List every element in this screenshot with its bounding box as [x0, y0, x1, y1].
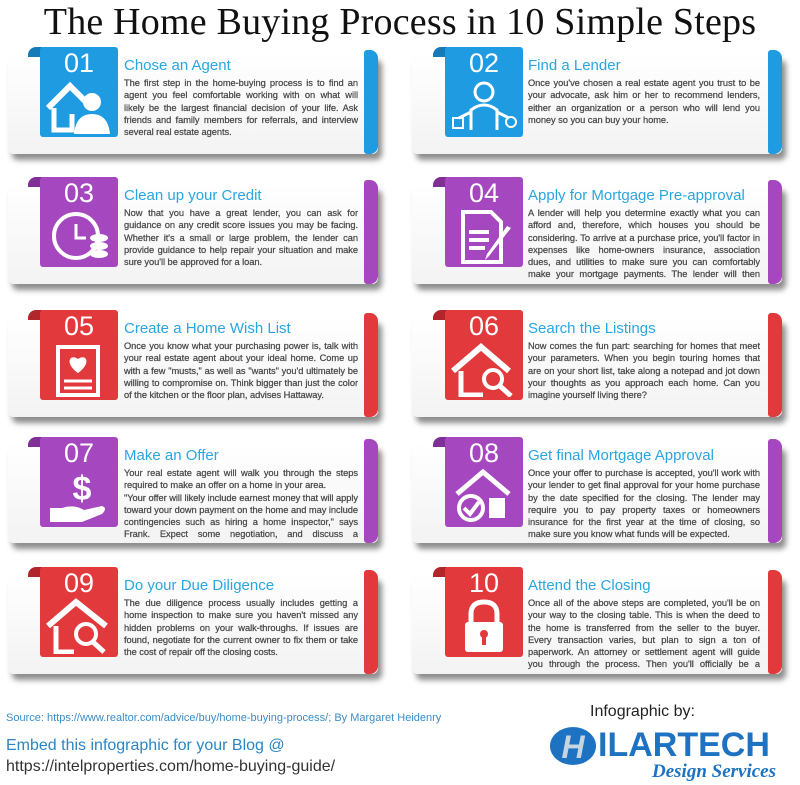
text: step 05: Create a Home Wish List [124, 320, 291, 337]
icon: approval house: 08 [469, 438, 499, 468]
text: step 07: Make an Offer [124, 447, 219, 464]
text: step 06: Search the Listings [528, 320, 656, 337]
title: The Home Buying Process in 10 Simple Steps [44, 1, 756, 43]
panel: step 05 [8, 310, 386, 427]
panel: step 06 [412, 310, 790, 427]
icon: house inspection [40, 567, 118, 657]
icon: credit clock: 03 [64, 178, 94, 208]
embed text [6, 737, 335, 775]
logo: hilartech: ILARTECH [598, 726, 770, 764]
panel: step 10 [412, 567, 790, 684]
embed text: https://intelproperties.com/home-buying-guide/ [6, 758, 335, 775]
icon: house search: 06 [469, 311, 499, 341]
panel: step 09 [8, 567, 386, 684]
text: step 05: Once you know what your purchasing power is, talk with your real estate agent about your ideal home. Come up with a few "musts," as well as "wants" you'd ultimately be willing to compromise on. Think bigger than just the color of the kitchen or the floor plan, advises Hattaway. [124, 341, 358, 400]
icon: hand dollar: $ [73, 470, 92, 508]
logo: hilartech: Design Services [652, 761, 776, 782]
logo: hilartech [550, 703, 776, 782]
icon: lender person [445, 47, 523, 137]
text: step 03: Now that you have a great lender, you can ask for guidance on any credit score issues you may be facing. Whether it's a small or large problem, the lender can provide guidance to help repair your situation and make sure you'll be approved for a loan. [124, 208, 358, 267]
icon: house inspection: 09 [64, 568, 94, 598]
text: step 03: Clean up your Credit [124, 187, 262, 204]
icon: hand dollar [40, 437, 118, 527]
logo: hilartech: Infographic by: [590, 703, 695, 720]
text: step 02: Find a Lender [528, 57, 621, 74]
text: step 07: Your real estate agent will walk you through the steps required to make an offer on a home in your area. [124, 468, 358, 490]
panel: step 02 [412, 47, 790, 164]
icon: hand dollar: 07 [64, 438, 94, 468]
text: step 06: Now comes the fun part: searching for homes that meet your parameters. When you begin touring homes that are on your short list, take along a notepad and jot down your thoughts as you approach each home. Can you imagine yourself living there? [528, 341, 760, 400]
text: step 02 [528, 57, 760, 126]
panel: step 08 [412, 437, 790, 553]
icon: approval house [445, 437, 523, 527]
icon: padlock [445, 567, 523, 657]
panel: step 01 [8, 47, 386, 164]
icon: padlock: 10 [469, 568, 499, 598]
icon: document pencil: 04 [469, 178, 499, 208]
text: step 01: Chose an Agent [124, 57, 231, 74]
icon: wish list: 05 [64, 311, 94, 341]
icon: credit clock [40, 177, 118, 267]
logo: hilartech: H [561, 729, 585, 765]
source text: Source: https://www.realtor.com/advice/buy/home-buying-process/; By Margaret Heidenry [6, 712, 441, 724]
panel: step 04 [412, 177, 790, 294]
icon: house agent: 01 [64, 48, 94, 78]
text: step 08: Once your offer to purchase is accepted, you'll work with your lender to get final approval for your home purchase by the date specified for the closing. The lender may require you to pay property taxes or homeowners insurance for the first year at the time of closing, so make sure you know what funds will be expected. [528, 468, 760, 539]
text: step 01: The first step in the home-buying process is to find an agent you feel comfortable working with on what will likely be the largest financial decision of your life. Ask friends and family members for referrals, and interview several real estate agents. [124, 78, 358, 137]
embed text: Embed this infographic for your Blog @ [6, 737, 285, 754]
text: step 10: Attend the Closing [528, 577, 651, 594]
text: step 07 [124, 447, 358, 540]
panel: step 07 [8, 437, 386, 553]
text: step 04: Apply for Mortgage Pre-approval [528, 187, 745, 204]
icon: house agent [40, 47, 118, 137]
text: step 09: Do your Due Diligence [124, 577, 274, 594]
icon: wish list [40, 310, 118, 400]
text: step 08: Get final Mortgage Approval [528, 447, 714, 464]
icon: document pencil [445, 177, 523, 267]
text: step 02: Once you've chosen a real estate agent you trust to be your advocate, ask him or her to recommend lenders, either an organization or a person who will lend you money so you can buy your home. [528, 78, 760, 125]
icon: lender person: 02 [469, 48, 499, 78]
icon: house search [445, 310, 523, 400]
text: step 09: The due diligence process usually includes getting a home inspection to make sure you haven't missed any hidden problems on your walk-throughs. If issues are found, negotiate for the current owner to fix them or take the cost of repair off the closing costs. [124, 598, 358, 657]
panel: step 03 [8, 177, 386, 294]
